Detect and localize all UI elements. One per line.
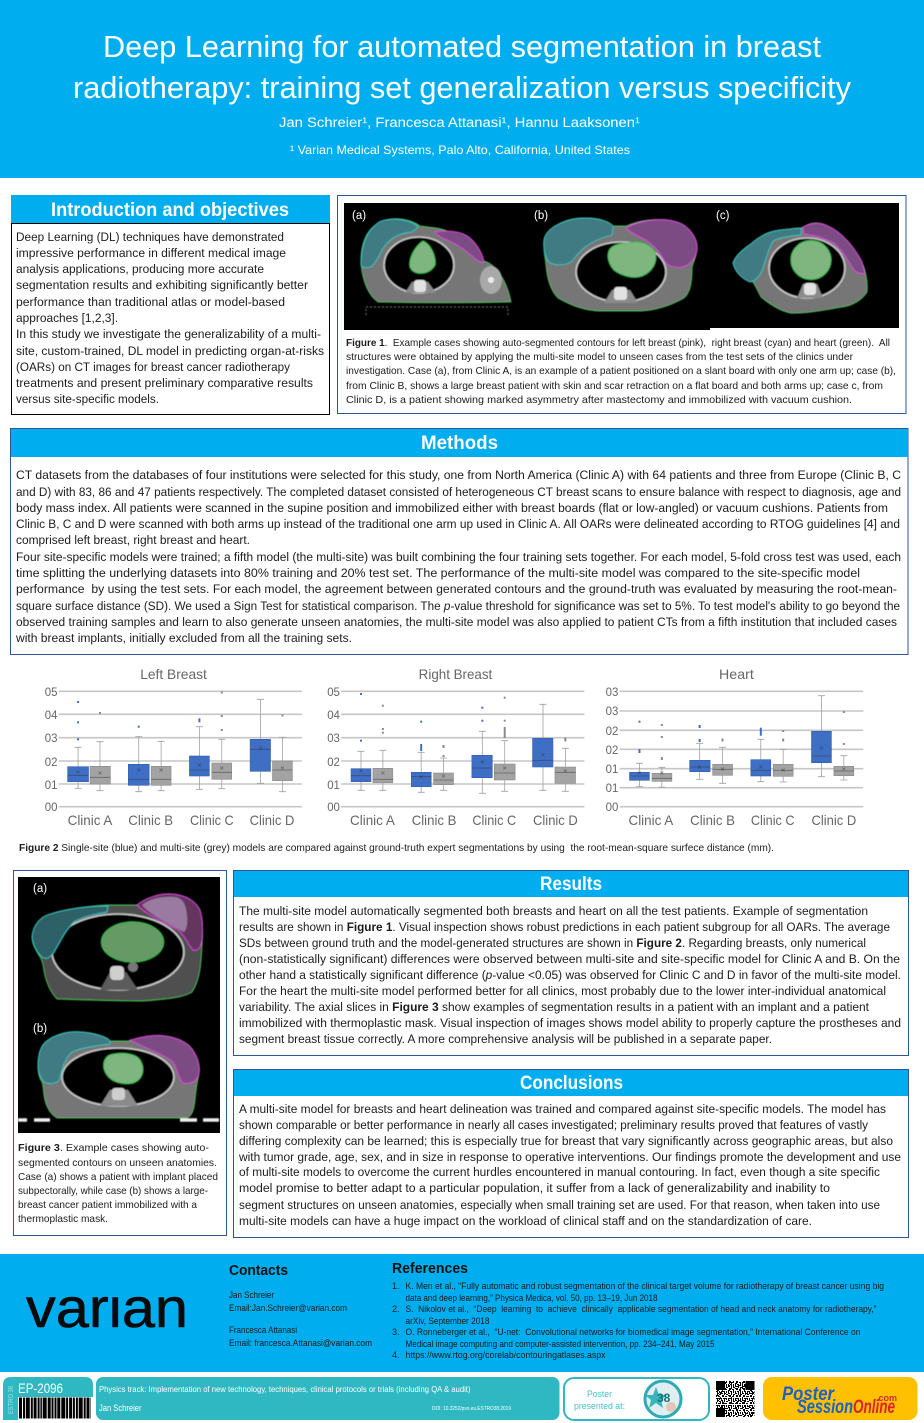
chart: left breast: 01 <box>45 780 57 792</box>
references <box>392 1260 884 1360</box>
presented label: presented at: <box>574 1401 625 1411</box>
methods text: square surface distance (SD). We used a Sign Test for statistical comparison. The p-value threshold for significance was set to 5%. To test model's ability to go beyond the <box>16 599 900 613</box>
results text: segment breast tissue correctly. A more comprehensive analysis will be published in a separate paper. <box>239 1032 772 1046</box>
panel: conclusions <box>234 1070 908 1238</box>
logo: PosterSessionOnline <box>763 1377 918 1420</box>
track description: Physics track: Implementation of new technology, techniques, clinical protocols or trials (including QA & audit) <box>99 1384 471 1394</box>
references: arXiv, September 2018 <box>406 1316 490 1326</box>
chart: heart: 01 <box>606 783 618 795</box>
poster presented at box <box>564 1378 709 1420</box>
figure 1 caption: Clinic D, is a patient showing marked asymmetry after mastectomy and immobilized with vacuum cushion. <box>346 395 852 406</box>
methods text: performance by using the test sets. For each model, the agreement between generated contours and the ground-truth was evaluated by measuring the root-mean- <box>16 582 897 596</box>
chart: heart <box>606 667 863 828</box>
figure 1 CT images <box>344 203 900 331</box>
figure 1 caption: from Clinic B, shows a large breast patient with skin and scar retraction on a flat board and both arms up; case c, from <box>346 381 883 392</box>
congress tag: ESTRO 38 <box>6 1386 15 1414</box>
chart: left breast: Clinic B <box>128 812 173 828</box>
methods text: body mass index. All patients were scanned in the supine position and immobilized either with breast boards (flat or low-angled) or vacuum cushions. Patients from <box>16 501 888 515</box>
references: O. Ronneberger et al., “U-net: Convolutional networks for biomedical image segmentation,” International Conference on <box>406 1327 860 1337</box>
CT case b mask <box>18 1032 219 1120</box>
chart: heart: Clinic A <box>629 812 674 828</box>
chart: left breast: 02 <box>45 757 57 769</box>
methods text: observed training samples and learn to also generate unseen anatomies, the multi-site model was also applied to patient CTs from a fifth institution that included cases <box>16 615 897 629</box>
chart: right breast: Clinic A <box>350 812 395 828</box>
chart: left breast: Clinic C <box>190 812 234 828</box>
chart: heart: Clinic C <box>751 812 795 828</box>
intro text: analysis applications, producing more accurate <box>16 262 264 276</box>
chart: right breast: Clinic D <box>533 812 578 828</box>
chart: heart: Clinic B <box>690 812 735 828</box>
presented label <box>574 1389 625 1411</box>
chart: left breast: 03 <box>45 733 57 745</box>
authors: Jan Schreier¹, Francesca Attanasi¹, Hannu Laaksonen¹ <box>279 115 641 130</box>
poster number: EP-2096 <box>18 1381 63 1396</box>
references: 1. <box>392 1281 400 1291</box>
chart: right breast: 00 <box>327 802 340 814</box>
intro text: performance than traditional atlas or model-based <box>16 295 285 309</box>
results text: other hand a statistically significant difference (p-value <0.05) was observed for Clinic C and D in favor of the multi-site model. <box>239 968 901 982</box>
intro text: (OARs) on CT images for breast cancer radiotherapy <box>16 360 291 374</box>
results text: results are shown in Figure 1. Visual inspection shows robust predictions in each patient subgroup for all OARs. The average <box>239 920 890 934</box>
methods text: CT datasets from the databases of four institutions were selected for this study, one from North America (Clinic A) with 64 patients and three from Europe (Clinic B, C <box>16 468 901 482</box>
methods text: Four site-specific models were trained; a fifth model (the multi-site) was built combining the four training sets together. For each model, 5-fold cross test was used, each <box>16 550 901 564</box>
chart title: left breast: Left Breast <box>140 667 207 682</box>
contacts <box>229 1263 372 1348</box>
heading: methods: Methods <box>421 433 498 454</box>
chart: heart: 01 <box>606 764 618 776</box>
references: References <box>392 1260 468 1277</box>
figure 3 caption: subpectorally, while case (b) shows a large- <box>18 1186 208 1197</box>
panel: results <box>234 870 908 1056</box>
methods text: comprised left breast, right breast and heart. <box>16 533 250 547</box>
presented label: Poster <box>587 1389 612 1399</box>
figure 3 caption: thermoplastic mask. <box>18 1214 108 1225</box>
figure 1 caption: Figure 1. Example cases showing auto-segmented contours for left breast (pink), right breast (cyan) and heart (green). All <box>346 338 890 349</box>
conclusions text: differing complexity can be learned; this is especially true for breast that vary significantly across geographic areas, but also <box>239 1134 893 1148</box>
header banner <box>0 0 924 178</box>
logo: PosterSessionOnline: .com <box>876 1393 897 1404</box>
chart title: right breast: Right Breast <box>419 667 493 682</box>
results text <box>239 904 901 1046</box>
chart: right breast: 05 <box>327 687 340 699</box>
contacts: Contacts <box>229 1263 288 1279</box>
label b: (b) <box>33 1023 47 1035</box>
intro text: Deep Learning (DL) techniques have demonstrated <box>16 230 284 244</box>
icon: ESTRO 38 badge: 38 <box>657 1391 671 1405</box>
figure 3 caption <box>18 1143 218 1225</box>
intro text <box>16 230 324 406</box>
label a: (a) <box>33 883 47 895</box>
conclusions text <box>238 1102 901 1228</box>
chart: heart: 00 <box>606 802 618 814</box>
barcode <box>19 1398 91 1418</box>
figure 3 caption: segmented contours on unseen anatomies. <box>18 1158 217 1169</box>
contacts: Jan Schreier <box>229 1290 274 1300</box>
chart: left breast: Clinic A <box>68 812 113 828</box>
chart: heart: Clinic D <box>812 812 856 828</box>
chart: right breast: 01 <box>327 780 340 792</box>
DOI: DOI: 10.3252/pso.eu.ESTRO38.2019 <box>432 1406 511 1412</box>
panel: figure 3 <box>14 870 226 1236</box>
results text: The multi-site model automatically segmented both breasts and heart on all the test patients. Example of segmentation <box>239 904 868 918</box>
contacts: Email:Jan.Schreier@varian.com <box>229 1303 347 1313</box>
intro text: versus site-specific models. <box>16 392 159 406</box>
panel: introduction and objectives <box>11 195 330 414</box>
heading: introduction: Introduction and objectives <box>51 200 289 221</box>
intro text: In this study we investigate the generalizability of a multi- <box>16 327 321 341</box>
CT case a <box>361 219 511 315</box>
results text: (non-statistically significant) differences were observed between multi-site and site-specific model for Clinic A and B. On the <box>239 952 900 966</box>
CT case a implant <box>32 894 203 1001</box>
conclusions text: shown comparable or better performance in nearly all cases investigated; preliminary results proved that features of vastly <box>239 1118 869 1132</box>
heading: results: Results <box>540 874 602 895</box>
chart: left breast: Clinic D <box>250 812 294 828</box>
contacts: Email: francesca.Attanasi@varian.com <box>229 1338 372 1348</box>
references: Medical image computing and computer-assisted intervention, pp. 234–241, May 2015 <box>406 1339 714 1349</box>
results text: immobilized with thermoplastic mask. Visual inspection of images shows model ability to properly capture the prostheses and <box>239 1016 901 1030</box>
references: data and deep learning,” Physica Medica, vol. 50, pp. 13–19, Jun 2018 <box>406 1293 658 1303</box>
CT case b <box>544 218 697 311</box>
chart: right breast: Clinic B <box>412 812 456 828</box>
contacts: Francesca Attanasi <box>229 1325 297 1335</box>
methods text: and D) with 83, 86 and 47 patients respectively. The completed dataset consisted of heterogeneous CT breast scans to ensure balance with respect to diagnosis, age and <box>16 485 901 499</box>
intro text: impressive performance in different medical image <box>16 246 286 260</box>
chart: right breast: 03 <box>327 733 340 745</box>
chart: heart: 03 <box>606 687 618 699</box>
track info bar <box>96 1377 560 1420</box>
icon: ESTRO 38 badge <box>645 1381 681 1417</box>
intro text: treatments and present preliminary comparative results <box>16 376 313 390</box>
chart: heart: 02 <box>606 726 618 738</box>
intro text: approaches [1,2,3]. <box>16 311 118 325</box>
title: Deep Learning for automated segmentation in breast <box>103 29 821 64</box>
chart: heart: 03 <box>606 706 618 718</box>
chart: left breast: 05 <box>45 687 57 699</box>
conclusions text: multi-site models can have a huge impact on the workload of clinical staff and on the standardization of care. <box>239 1214 812 1228</box>
chart: right breast: 04 <box>327 710 341 722</box>
chart: left breast: 00 <box>45 802 57 814</box>
references: 4. <box>392 1350 400 1360</box>
logo: PosterSessionOnline: Session <box>797 1397 853 1418</box>
figure 3 caption: Figure 3. Example cases showing auto- <box>18 1143 209 1154</box>
poster ID badge <box>3 1377 93 1420</box>
conclusions text: with tumor grade, age, sex, and in size in response to operative interventions. Our findings promote the development and use <box>238 1150 901 1164</box>
logo: PosterSessionOnline: Poster <box>782 1384 835 1405</box>
logo: varian: varian <box>26 1276 188 1339</box>
affiliation: ¹ Varian Medical Systems, Palo Alto, California, United States <box>290 143 630 157</box>
label a: (a) <box>352 210 366 222</box>
label b: (b) <box>534 210 548 222</box>
references: https://www.rtog.org/corelab/contouringatlases.aspx <box>406 1350 606 1360</box>
intro text: site, custom-trained, DL model in predicting organ-at-risks <box>16 344 324 358</box>
title <box>73 29 851 105</box>
results text: variability. The axial slices in Figure 3 show examples of segmentation results in a patient with an implant and a patient <box>239 1000 870 1014</box>
panel: figure 2 box plots <box>19 667 863 854</box>
footer band <box>0 1254 924 1372</box>
conclusions text: A multi-site model for breasts and heart delineation was trained and compared against site-specific models. The model has <box>239 1102 886 1116</box>
results text: SDs between ground truth and the model-generated structures are shown in Figure 2. Regarding breasts, only numerical <box>239 936 866 950</box>
figure 1 caption <box>346 338 896 406</box>
references: 2. <box>392 1304 400 1314</box>
figure 3 caption: breast cancer patient immobilized with a <box>18 1200 197 1211</box>
QR code <box>716 1381 754 1417</box>
title: radiotherapy: training set generalization versus specificity <box>73 70 851 105</box>
methods text <box>15 468 901 645</box>
figure 2 caption: Figure 2 Single-site (blue) and multi-site (grey) models are compared against ground-truth expert segmentations by using the root-mean-square surfece distance (mm). <box>19 843 774 854</box>
figure 1 caption: investigation. Case (a), from Clinic A, is an example of a patient positioned on a slant board with only one arm up; case (b), <box>346 366 896 377</box>
figure 3 caption: Case (a) shows a patient with implant placed <box>18 1172 218 1183</box>
chart: heart: 02 <box>606 745 618 757</box>
methods text: with breast implants, initially excluded from all the training sets. <box>15 631 352 645</box>
references: S. Nikolov et al., “Deep learning to achieve clinically applicable segmentation of head and neck anatomy for radiotherapy,” <box>406 1304 876 1314</box>
logo: PosterSessionOnline: Online <box>853 1397 895 1418</box>
methods text: time splitting the underlying datasets into 80% training and 20% test set. The performance of the multi-site model was compared to the site-specific model <box>16 566 860 580</box>
references: K. Men et al., “Fully automatic and robust segmentation of the clinical target volume for radiotherapy of breast cancer using big <box>406 1281 884 1291</box>
figure 1 caption: structures were obtained by applying the multi-site model to unseen cases from the test sets of the clinics under <box>346 352 854 363</box>
heading: conclusions: Conclusions <box>520 1073 623 1094</box>
chart title: heart: Heart <box>719 667 754 682</box>
chart: left breast <box>45 667 302 828</box>
chart: right breast: 02 <box>327 757 340 769</box>
chart: left breast: 04 <box>45 710 58 722</box>
chart: right breast: Clinic C <box>472 812 516 828</box>
results text: For the heart the multi-site model performed better for all clinics, most probably due to the lower inter-individual anatomical <box>239 984 886 998</box>
figure 3 CT images <box>18 877 220 1133</box>
conclusions text: of multi-site models to overcome the current hurdles encountered in manual contouring. In fact, even though a site specific <box>239 1165 880 1179</box>
conclusions text: segment structures on unseen anatomies, especially when small training set are used. For that reason, when taken into use <box>239 1198 880 1212</box>
chart: right breast <box>327 667 584 828</box>
panel: methods <box>10 428 908 654</box>
presenter: Jan Schreier <box>99 1403 142 1413</box>
references: 3. <box>392 1327 400 1337</box>
methods text: Clinic B, C and D were scanned with both arms up instead of the traditional one arm up used in Clinic A. All OARs were delineated according to RTOG guidelines [4] and <box>16 517 900 531</box>
intro text: segmentation results and exhibiting significantly better <box>16 278 308 292</box>
panel: figure 1 <box>338 196 906 414</box>
CT case c <box>733 223 867 313</box>
label c: (c) <box>716 210 730 222</box>
conclusions text: model promise to better adapt to a particular population, it suffer from a lack of generalizability and inability to <box>239 1181 830 1195</box>
